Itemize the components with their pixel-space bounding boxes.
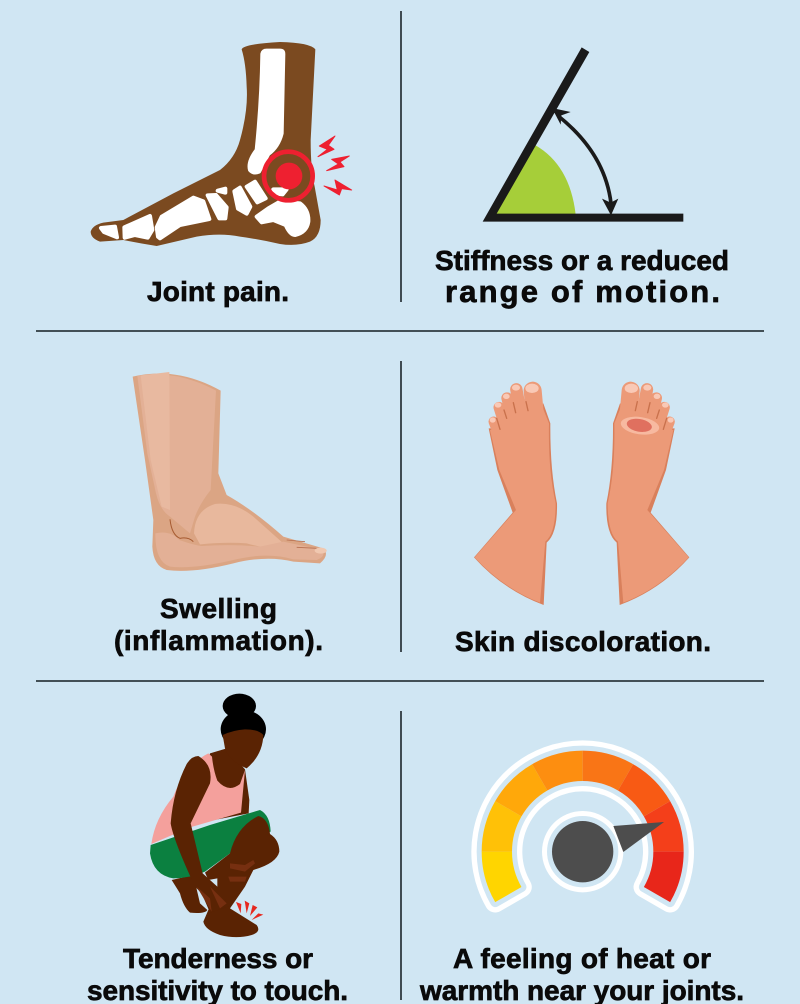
heading: swelling line 1: Swelling — [160, 593, 277, 624]
icon: swollen foot — [133, 372, 327, 571]
icon: angle with range arrow — [483, 47, 683, 222]
panel: skin discoloration — [455, 384, 711, 657]
heading: tenderness line 1: Tenderness or — [123, 943, 313, 974]
panel: swelling — [114, 372, 327, 656]
panel: joint pain — [91, 42, 352, 307]
icon: crouching woman holding ankle — [150, 694, 279, 937]
panel: tenderness — [87, 694, 348, 1004]
icon: foot skeleton with pain marker — [91, 42, 352, 246]
panel: heat — [419, 751, 744, 1004]
icon: two feet with discoloured patch — [474, 384, 689, 605]
icon: heat gauge — [482, 751, 684, 902]
heading: swelling line 2: (inflammation). — [114, 625, 323, 656]
panel: stiffness — [435, 47, 729, 309]
heading: heat line 1: A feeling of heat or — [453, 943, 711, 974]
heading: joint pain: Joint pain. — [147, 276, 289, 307]
heading: skin discoloration: Skin discoloration. — [455, 626, 711, 657]
heading: stiffness line 2: range of motion. — [445, 274, 720, 309]
heading: stiffness line 1: Stiffness or a reduced — [435, 245, 729, 276]
